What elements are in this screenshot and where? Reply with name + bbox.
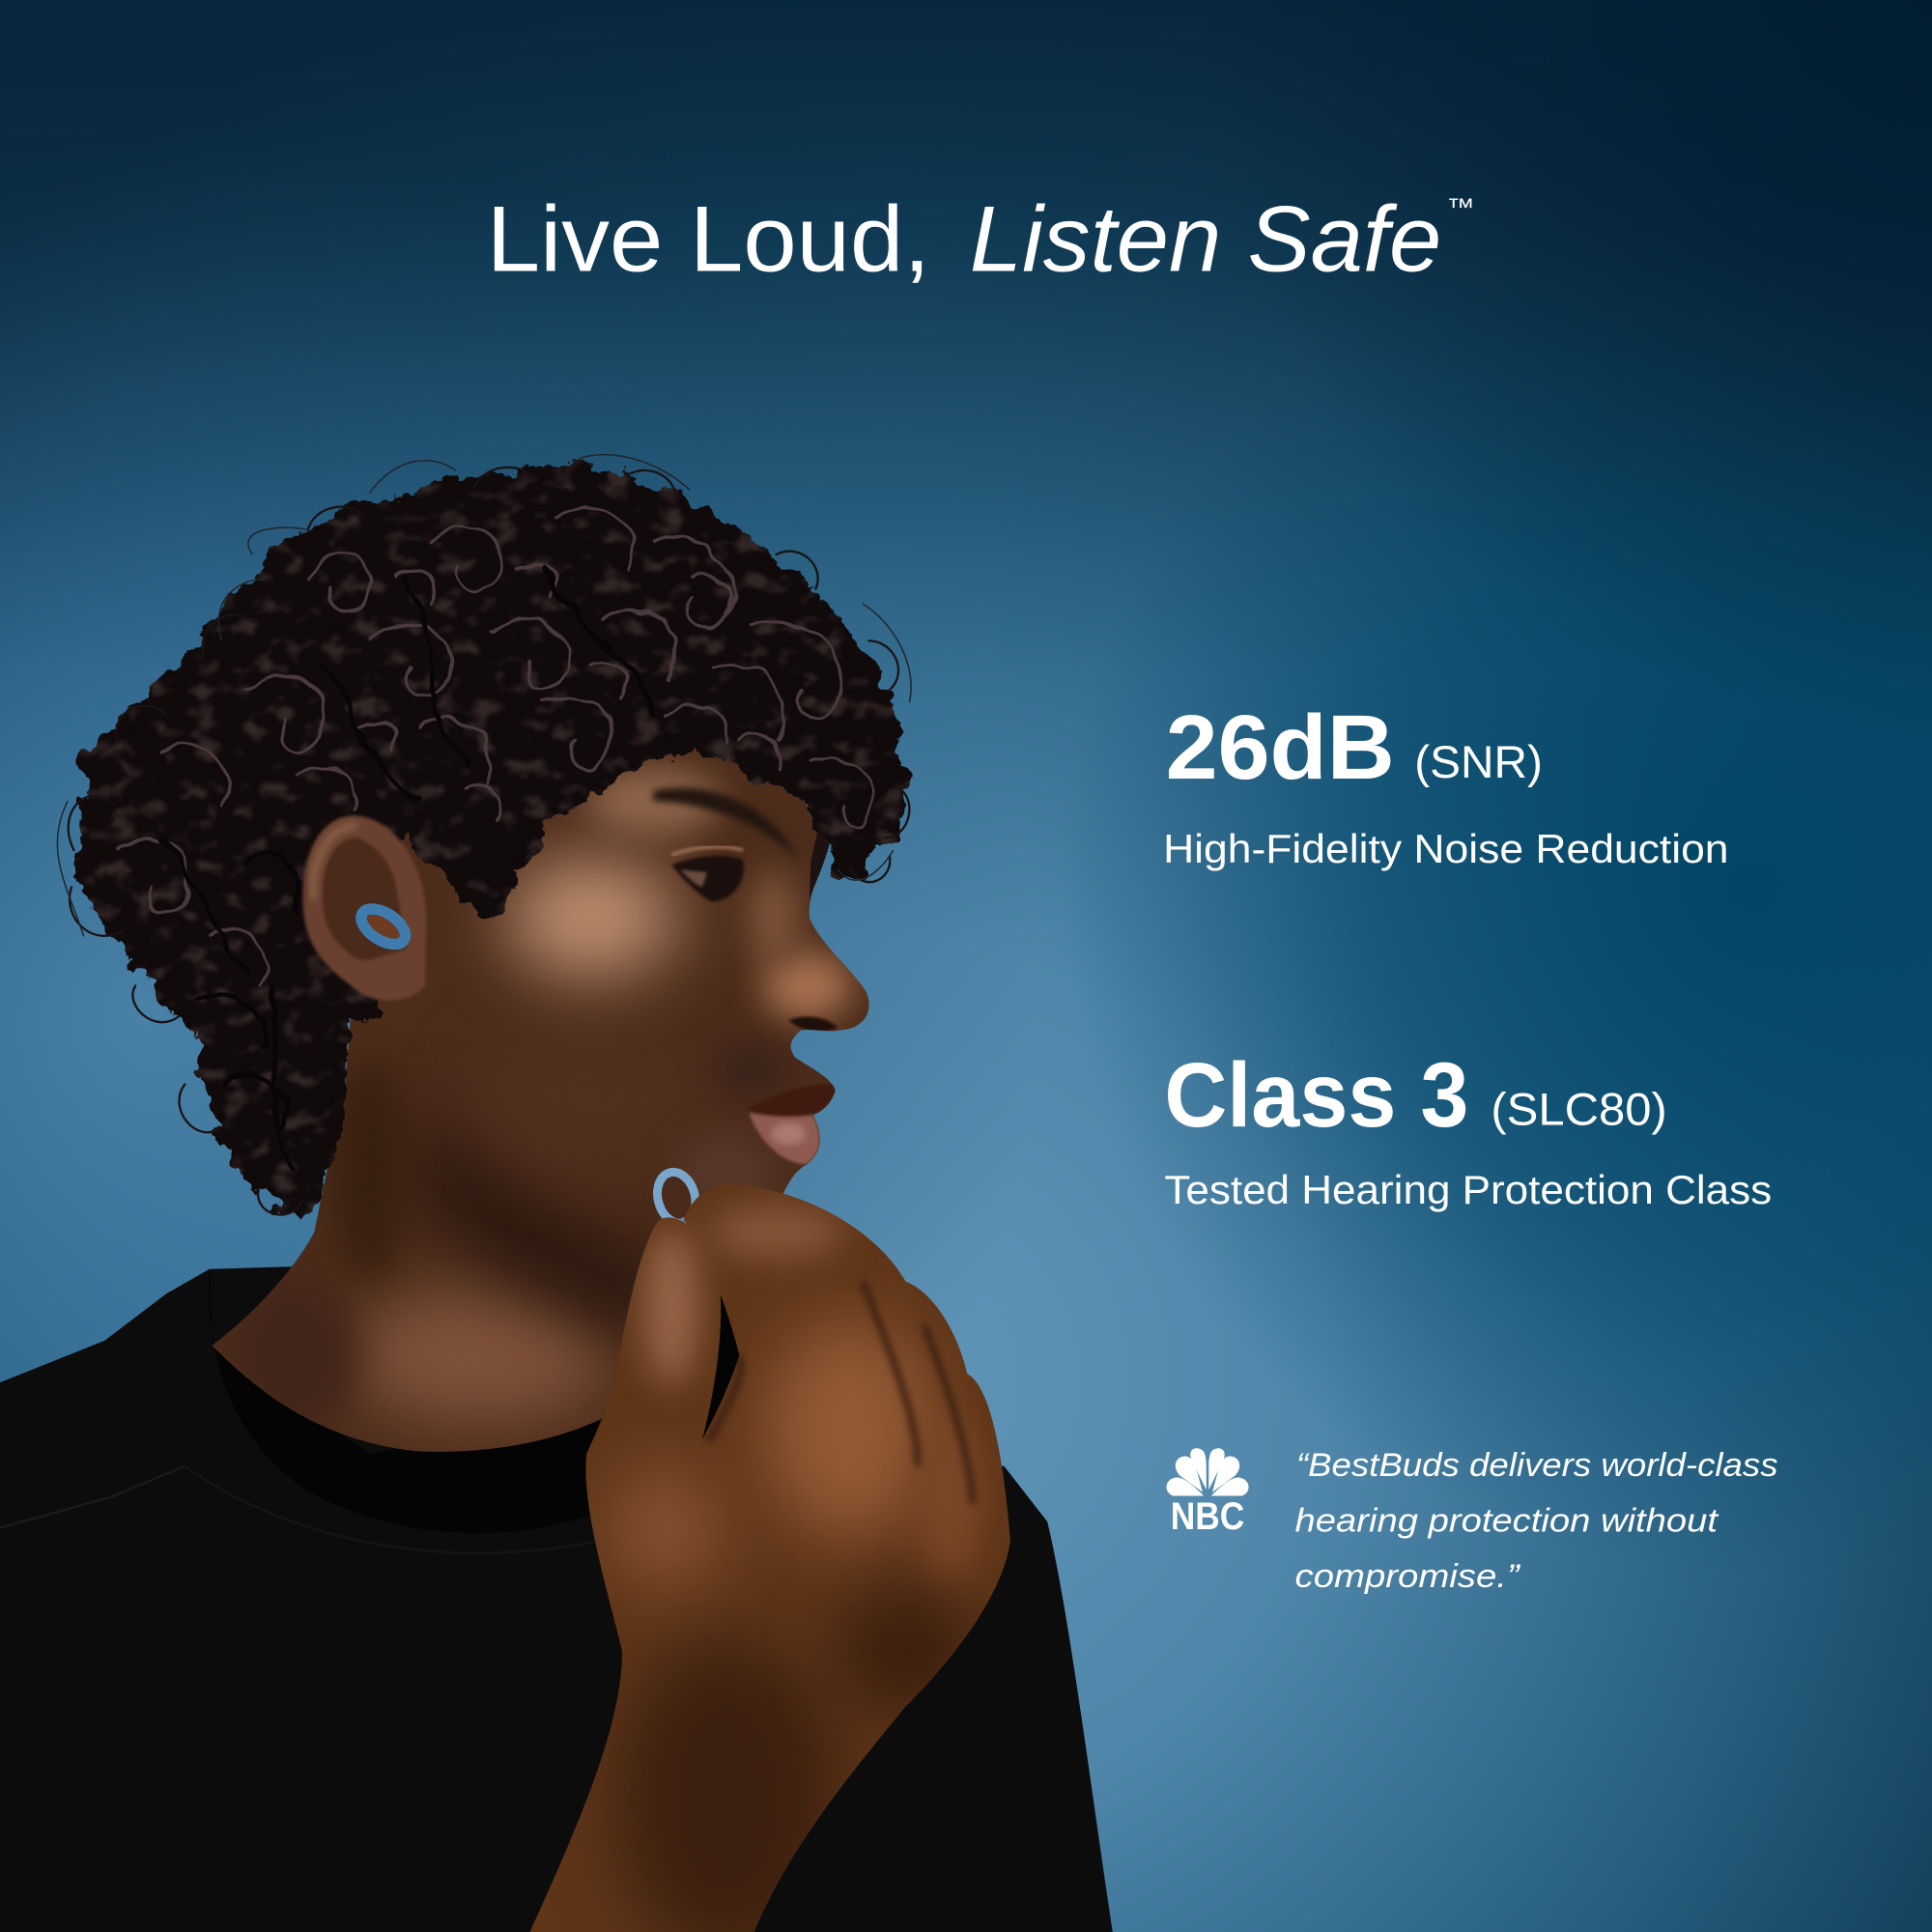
press quote: hearing protection without bbox=[1295, 1502, 1719, 1539]
hand bbox=[518, 1171, 1035, 1932]
title: Listen Safe bbox=[970, 186, 1441, 292]
stat: 26dB SNR: (SNR) bbox=[1414, 737, 1543, 788]
title: Live Loud, bbox=[487, 186, 930, 292]
title bbox=[487, 186, 1475, 292]
black t-shirt bbox=[0, 1266, 1113, 1932]
ear bbox=[303, 815, 426, 1001]
earbud in ear bbox=[355, 902, 412, 952]
stat: 26dB SNR bbox=[1163, 697, 1729, 871]
stat: 26dB SNR: High-Fidelity Noise Reduction bbox=[1163, 826, 1729, 871]
press quote: “BestBuds delivers world-class bbox=[1296, 1447, 1778, 1484]
press quote: compromise.” bbox=[1295, 1558, 1520, 1595]
lips bbox=[747, 1084, 836, 1164]
stat: Class 3 SLC80: Class 3 bbox=[1164, 1045, 1468, 1147]
press quote bbox=[1295, 1447, 1778, 1595]
face and neck bbox=[213, 748, 869, 1452]
icon: NBC peacock logo bbox=[1166, 1448, 1249, 1538]
title: ™ bbox=[1446, 194, 1475, 221]
eye and eyebrow bbox=[653, 787, 831, 902]
earplug held in fingers bbox=[652, 1168, 715, 1249]
photo: man holding earplug bbox=[0, 455, 1113, 1932]
icon: NBC peacock logo: NBC bbox=[1171, 1495, 1244, 1538]
stat: Class 3 SLC80: Tested Hearing Protection Class bbox=[1164, 1167, 1772, 1212]
stat: Class 3 SLC80 bbox=[1164, 1045, 1772, 1212]
stat: Class 3 SLC80: (SLC80) bbox=[1491, 1085, 1667, 1136]
stat: 26dB SNR: 26dB bbox=[1166, 697, 1395, 799]
curly hair bbox=[57, 455, 911, 1215]
nostril bbox=[788, 1016, 838, 1032]
